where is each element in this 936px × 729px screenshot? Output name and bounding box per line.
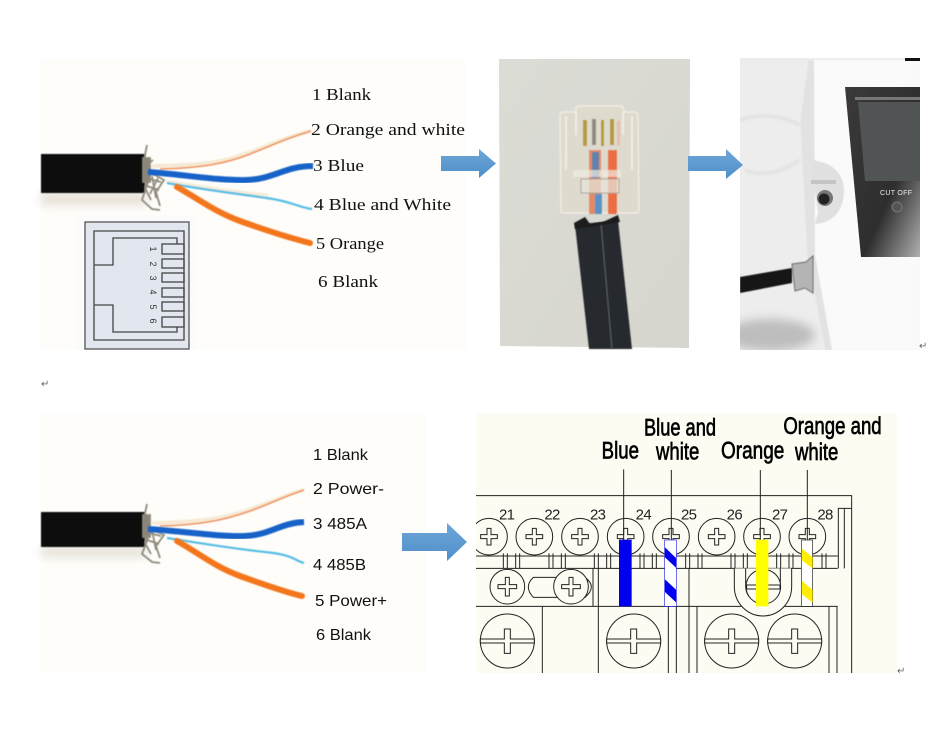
terminal numbers: 28 [817,506,833,523]
wire labels: 4 Blue and White [314,195,451,214]
return mark: ↵ [897,666,905,677]
arrow: cable to plug [441,149,496,178]
return mark: ↵ [41,379,49,390]
inset: RJ12 pin diagram: 3 [148,275,158,281]
frayed shield [142,504,164,563]
wire function labels: 2 Power- [313,481,384,498]
panel: meter connection photo [725,58,920,351]
wire function labels: 3 485A [313,516,367,533]
cable shadow [41,547,146,557]
inset: RJ12 pin diagram [76,215,196,350]
wire marker: blue and white [665,540,676,606]
panel: crimped plug photo [499,59,690,349]
lower screws [480,614,822,668]
terminal numbers: 21 [499,506,515,523]
panel: stripped cable wire colours [41,59,466,350]
terminal numbers: 23 [590,506,606,523]
inset: RJ12 pin diagram: 4 [148,289,158,295]
wire: 485B [167,538,304,563]
leader lines [624,469,807,540]
cable shadow [41,193,146,205]
wire function labels [313,447,387,644]
frayed shield [142,145,164,210]
screw recess [813,160,844,224]
inset: RJ12 pin diagram: 1 [148,246,158,252]
wire labels: 2 Orange and white [311,120,465,139]
soft table shadow [725,319,815,351]
wire: blue and white [166,181,312,209]
cable [575,220,632,349]
colour labels: Orange and [783,413,882,440]
inset: RJ12 pin diagram: 2 [148,261,158,267]
wire function labels: 6 Blank [316,627,372,644]
wire labels: 5 Orange [316,234,384,253]
wire: 485A [148,522,304,536]
terminal screws 21 to 28 [471,518,826,568]
colour labels: Blue and [644,414,716,441]
inset: RJ12 pin diagram: 6 [148,318,158,324]
colour labels: white [794,439,838,466]
brass pins [583,119,620,146]
frame lines [475,496,852,673]
link screws [490,568,792,616]
transparent plug body [560,106,639,214]
colour labels [602,413,882,466]
terminal numbers: 27 [772,506,788,523]
wire: power minus [152,490,304,526]
black cable [41,512,145,547]
cut off label: CUT OFF [880,190,912,197]
inset: RJ12 pin diagram: 5 [148,304,158,310]
wire marker: orange and white [801,540,813,606]
wire function labels: 5 Power+ [315,593,387,610]
meter screen [845,87,920,257]
colour labels: white [655,438,699,465]
terminal numbers: 24 [636,506,651,523]
panel: terminal block diagram [471,413,897,673]
black cable [41,154,145,193]
arrow: wires to terminals [402,523,467,561]
wire marker: orange [756,540,768,606]
wire labels: 6 Blank [318,272,379,291]
wire labels [311,85,465,291]
wire: blue [148,166,313,180]
cable jacket end [574,215,620,229]
terminal numbers [500,510,833,520]
terminal numbers: 26 [727,506,742,523]
wire: orange and white [152,131,311,169]
black cable and connector [740,268,792,293]
terminal numbers: 22 [544,506,560,523]
wire: orange [177,187,310,243]
meter body [814,60,920,350]
wire marker: blue [619,540,632,606]
internal wires [589,150,601,214]
wire function labels: 4 485B [313,557,366,574]
wire labels: 1 Blank [312,85,372,104]
return mark: ↵ [919,341,927,352]
wire function labels: 1 Blank [313,447,369,464]
terminal numbers: 25 [681,506,697,523]
arrow: plug to meter [688,149,743,179]
wire labels: 3 Blue [313,156,364,175]
wire: power plus [177,541,302,596]
colour labels: Blue [602,438,639,465]
panel: stripped cable wire functions [41,414,426,673]
colour labels: Orange [721,438,784,465]
plug latch [573,170,621,177]
